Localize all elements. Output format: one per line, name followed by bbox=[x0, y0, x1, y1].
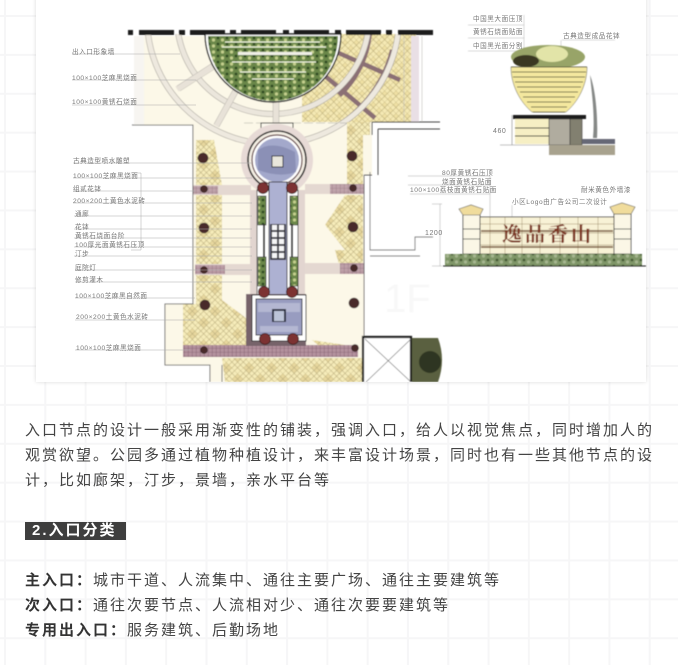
left plan labels: 组贰花钵 bbox=[73, 184, 102, 193]
left plan labels: 200×200土黄色水泥砖 bbox=[73, 196, 146, 205]
wall labels: 小区Logo由广告公司二次设计 bbox=[512, 197, 607, 206]
right boundary band bbox=[364, 36, 440, 175]
left plan labels: 200×200土黄色水泥砖 bbox=[76, 312, 149, 321]
square fountain plaza bbox=[246, 294, 306, 346]
left plan labels bbox=[72, 47, 149, 352]
plaza ground bbox=[134, 36, 418, 382]
heading: entrance types: 2.入口分类 bbox=[32, 522, 117, 539]
plaza paving: left arcs and spokes bbox=[144, 33, 402, 144]
central walkway bbox=[250, 182, 305, 300]
footprint outline bbox=[370, 172, 433, 256]
faint 1F mark: 1F bbox=[384, 277, 431, 321]
left plan labels: 庭院灯 bbox=[75, 263, 96, 272]
urn labels: 古典造型成品花钵 bbox=[563, 31, 620, 40]
text: 专用出入口：服务建筑、后勤场地 bbox=[25, 622, 280, 639]
wall logo lettering: 逸品香山 bbox=[502, 218, 594, 247]
wall labels: 烧面黄锈石贴面 bbox=[442, 177, 492, 186]
left plan labels: 100×100芝麻黑烧面 bbox=[72, 73, 137, 82]
text: 次入口：通往次要节点、人流相对少、通往次要要建筑等 bbox=[25, 597, 450, 614]
left plan labels: 100×100芝麻黑烧面 bbox=[73, 171, 138, 180]
paving bottom bbox=[222, 340, 362, 382]
left plan labels: 100×100芝麻黑烧面 bbox=[76, 343, 141, 352]
cross bands bbox=[183, 184, 364, 357]
urn labels: 460 bbox=[493, 128, 506, 135]
wall labels bbox=[410, 168, 631, 237]
central fountain circle bbox=[241, 123, 313, 196]
left plan labels: 100厚光面黄锈石压顶 bbox=[75, 240, 145, 249]
text: 观赏欲望。公园多通过植物种植设计，来丰富设计场景，同时也有一些其他节点的设 bbox=[25, 447, 654, 464]
plaza paving: right sector bbox=[302, 33, 417, 123]
left plan labels: 100×100黄锈石烧面 bbox=[72, 97, 137, 106]
wall labels: 1200 bbox=[425, 230, 443, 237]
entrance wall elevation bbox=[408, 176, 646, 266]
text: 计，比如廊架，汀步，景墙，亲水平台等 bbox=[25, 472, 331, 489]
urn labels: 黄锈石烧面贴面 bbox=[473, 27, 523, 36]
flower pots bbox=[258, 182, 298, 344]
urn labels: 中国黑光面分割 bbox=[473, 41, 523, 50]
left plan labels: 古典造型喷水雕塑 bbox=[73, 156, 130, 165]
paving right column bbox=[347, 122, 370, 193]
left plan labels: 黄锈石烧面台阶 bbox=[75, 231, 125, 240]
wall labels: 80厚黄锈石压顶 bbox=[442, 168, 493, 177]
paragraph: entrance node design bbox=[25, 422, 654, 489]
left plan labels: 通廊 bbox=[75, 209, 89, 218]
paving left column bbox=[183, 140, 246, 345]
left plan labels: 100×100芝麻黑自然面 bbox=[75, 291, 148, 300]
planter urn elevation bbox=[468, 15, 615, 155]
urn labels bbox=[473, 14, 620, 135]
courtyard trees bbox=[198, 151, 359, 354]
plan outlines bbox=[132, 125, 364, 382]
text: 主入口：城市干道、人流集中、通往主要广场、通往主要建筑等 bbox=[25, 572, 501, 589]
left plan labels: 修剪灌木 bbox=[75, 275, 104, 284]
left plan labels: 花钵 bbox=[75, 222, 89, 231]
top scale bar bbox=[128, 30, 433, 35]
left plan labels: 出入口形象墙 bbox=[72, 47, 115, 56]
list: entrance types bbox=[25, 572, 501, 639]
left callout lines bbox=[72, 54, 252, 350]
semicircular planting bed bbox=[205, 34, 341, 102]
crossed building box bbox=[363, 337, 442, 383]
wall labels: 耐米黄色外墙漆 bbox=[581, 185, 631, 194]
left plan labels: 汀步 bbox=[75, 250, 89, 258]
wall labels: 100×100荔枝面黄锈石贴面 bbox=[410, 185, 497, 194]
landscape plan drawing bbox=[72, 14, 647, 382]
urn labels: 中国黑大面压顶 bbox=[473, 14, 523, 23]
text: 入口节点的设计一般采用渐变性的铺装，强调入口，给人以视觉焦点，同时增加人的 bbox=[25, 422, 654, 439]
image card bbox=[36, 0, 646, 382]
